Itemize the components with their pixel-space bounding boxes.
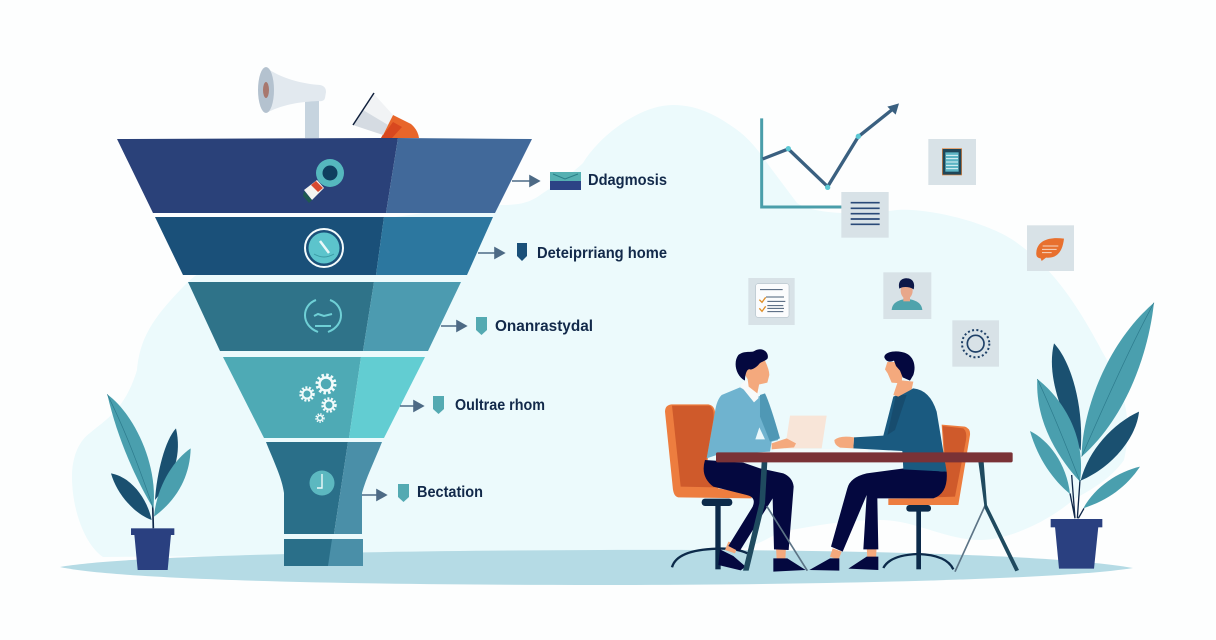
icon card: document [928,139,976,185]
icon card: text lines [841,192,889,238]
plant left [107,394,191,570]
funnel segment 6 [284,539,363,566]
left chair [665,404,752,569]
background blob [72,105,1128,557]
label marker 4 [433,396,444,414]
funnel segment 3 [188,282,461,351]
funnel segment 4 [223,357,425,438]
right chair [883,425,970,569]
arrow 4 [400,401,423,411]
funnel segment 1 [117,138,532,213]
icon: magnifier [303,159,344,203]
arrow 3 [441,321,466,331]
icon: brackets [305,300,341,332]
line chart [762,103,899,207]
icon: round badge J [310,470,334,496]
person right [809,351,947,571]
label text 4: Oultrae rhom [455,397,545,414]
icon card: speech leaf [1027,225,1074,271]
laptop [773,416,868,452]
label icon 1 [550,172,581,190]
funnel segment 5 [266,442,382,534]
megaphone on stand [258,67,326,138]
label marker 5 [398,484,409,502]
leaves [107,394,191,520]
label text 5: Bectation [417,484,483,501]
icon card: checklist [748,278,795,325]
label row 5 [362,484,483,502]
meeting scene [665,349,1019,572]
arrow 5 [362,490,386,500]
table [716,452,1019,572]
icon: gears [300,375,336,422]
label marker 2 [517,243,527,261]
label row 2 [478,243,667,262]
label row 1 [512,172,667,190]
label marker 3 [476,317,487,335]
label row 3 [441,317,593,335]
orange megaphone [353,93,419,138]
label text 2: Deteiprriang home [537,245,667,262]
label row 4 [400,396,545,414]
label text 1: Ddagmosis [588,172,667,189]
person left [704,349,806,572]
funnel [117,67,532,566]
floating chart and icons [748,103,1074,367]
icon: circle badge [305,229,343,267]
stems [1070,475,1084,518]
plant right [1030,303,1154,569]
funnel segment 2 [155,217,493,275]
arrow 2 [478,248,504,258]
icon card: dotted circle [952,320,999,367]
arrow 1 [512,176,539,186]
pot [131,528,174,570]
leaves [1030,303,1154,508]
pot [1051,519,1102,569]
icon card: person [883,272,931,319]
label text 3: Onanrastydal [495,318,593,335]
stem [150,503,156,528]
ground ellipse [60,550,1133,585]
